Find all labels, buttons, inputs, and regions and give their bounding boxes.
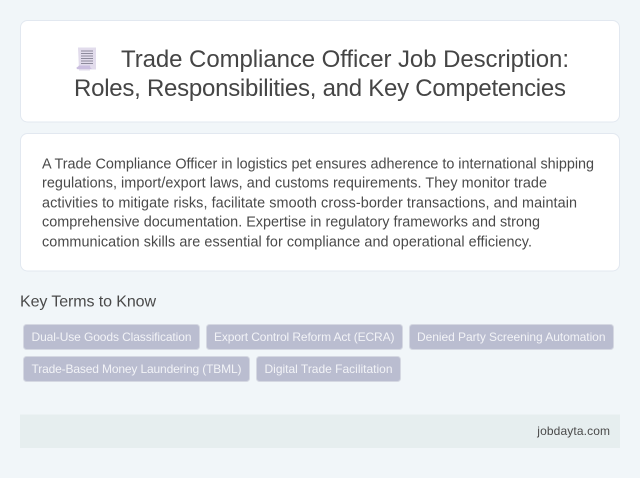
description text: regulations, import/export laws, and customs requirements. They monitor trade: [42, 176, 547, 192]
heading: key terms: Key Terms to Know: [20, 294, 156, 311]
tag: TBML: Trade-Based Money Laundering (TBML): [32, 362, 242, 376]
tag: dual-use goods: [24, 324, 200, 350]
description text: A Trade Compliance Officer in logistics pet ensures adherence to international shipping: [42, 156, 594, 172]
footer source text: jobdayta.com: [536, 424, 610, 438]
tag: digital trade: Digital Trade Facilitation: [264, 362, 392, 376]
title line 2: Roles, Responsibilities, and Key Competencies: [74, 75, 566, 102]
footer bar: [20, 414, 620, 448]
description text: communication skills are essential for compliance and operational efficiency.: [42, 234, 532, 250]
description text: comprehensive documentation. Expertise in regulatory frameworks and strong: [42, 215, 540, 231]
tag: TBML: [24, 356, 250, 382]
tag: digital trade: [256, 356, 400, 382]
panel: title card: [20, 20, 620, 122]
tag: dual-use goods: Dual-Use Goods Classification: [32, 330, 192, 344]
panel: description card: [20, 134, 620, 271]
tag: export control: [206, 324, 402, 350]
tag: denied party: [410, 324, 614, 350]
description text: activities to mitigate risks, facilitate smooth cross-border transactions, and maintain: [42, 195, 577, 211]
tag: denied party: Denied Party Screening Automation: [417, 330, 606, 344]
title line 1: Trade Compliance Officer Job Description:: [121, 46, 569, 73]
tag list: [24, 324, 614, 382]
tag: export control: Export Control Reform Act (ECRA): [214, 330, 394, 344]
icon: document scroll: [76, 48, 96, 70]
description text: [42, 156, 594, 250]
